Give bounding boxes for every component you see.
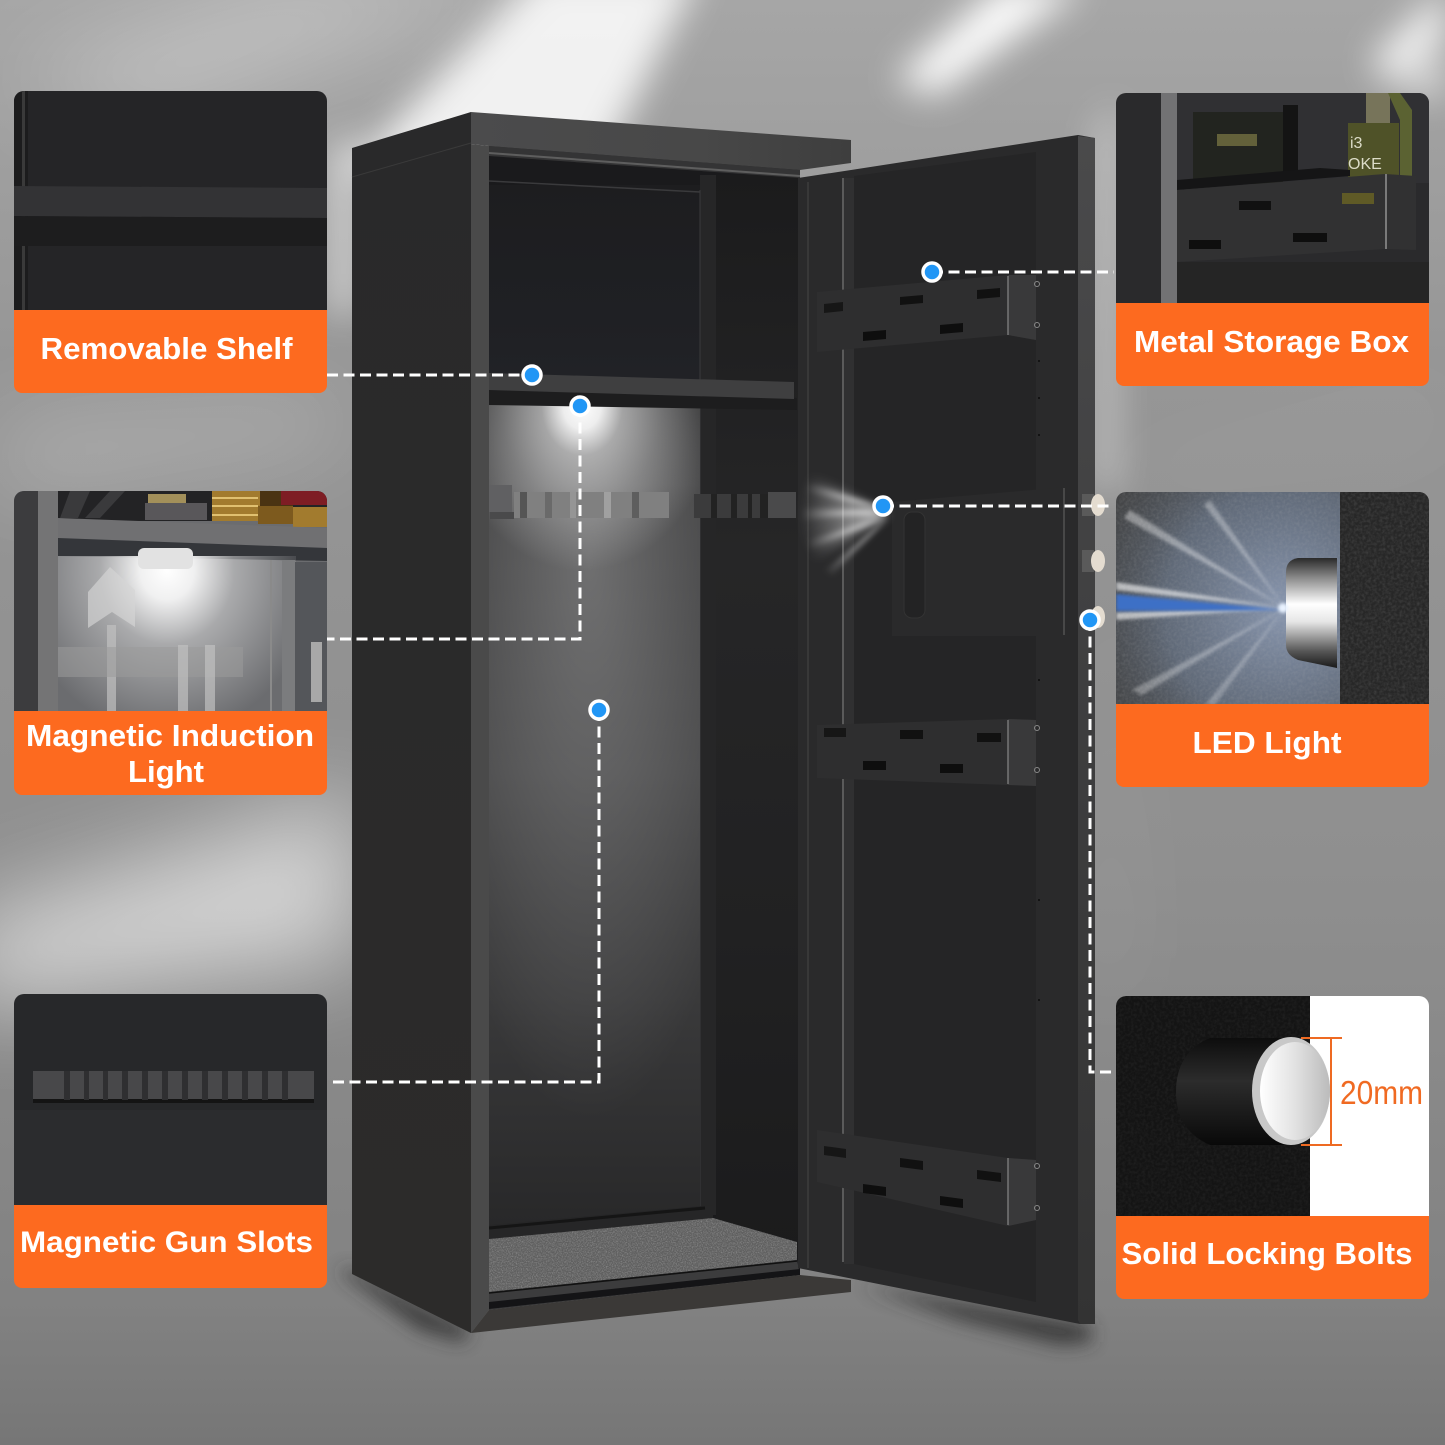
door locking bolts (1082, 494, 1105, 628)
orange label bar (1116, 1216, 1429, 1299)
panel: removable shelf (14, 91, 327, 393)
panel: LED light (1116, 492, 1429, 787)
safe door, open (798, 135, 1105, 1324)
label: Removable Shelf (40, 331, 293, 366)
cabinet floor carpet (489, 1218, 797, 1292)
callout lines (327, 272, 1114, 1082)
label: Magnetic Induction (26, 718, 314, 753)
light photo (14, 491, 327, 720)
top door bracket (817, 275, 1040, 352)
label: LED Light (1192, 725, 1342, 760)
panel: magnetic induction light (14, 491, 327, 795)
storage box photo (1116, 93, 1429, 308)
door LED light flare (800, 470, 888, 575)
cabinet bottom plinth (471, 1275, 851, 1333)
bolt photo (1116, 996, 1429, 1221)
storage box photo: OKE (1348, 156, 1382, 173)
LED photo (1116, 492, 1429, 707)
cabinet front frame (471, 112, 851, 170)
safe cabinet body (352, 112, 851, 1333)
cabinet interior back wall (489, 140, 800, 1315)
bottom rail (489, 1260, 800, 1310)
under-shelf shadow (489, 390, 716, 408)
magnetic gun slots strip (489, 485, 796, 519)
back wall lit by LED (489, 402, 700, 1226)
orange label bar (14, 310, 327, 393)
label: Metal Storage Box (1134, 324, 1410, 359)
light pool (58, 556, 296, 720)
shelf (489, 373, 794, 399)
baseboard (489, 1205, 713, 1239)
panel: solid locking bolts (1116, 996, 1429, 1299)
label: Magnetic Gun Slots (20, 1226, 313, 1259)
orange label bar (14, 1205, 327, 1288)
orange label bar (14, 711, 327, 795)
bottom door bracket (817, 1130, 1040, 1226)
callout marker dots (523, 263, 1099, 719)
storage pocket on door (892, 487, 1067, 636)
middle door bracket (817, 719, 1040, 786)
panel: metal storage box (1116, 93, 1429, 386)
orange label bar (1116, 704, 1429, 787)
right interior wall (716, 418, 798, 854)
shelf photo (14, 91, 327, 316)
slots photo (14, 994, 327, 1210)
label: Solid Locking Bolts (1122, 1236, 1412, 1271)
dimension value: 20mm (1340, 1074, 1423, 1111)
storage box photo: i3 (1350, 135, 1363, 152)
orange label bar (1116, 303, 1429, 386)
label: Light (128, 754, 204, 789)
left side panel (352, 112, 471, 1333)
safe cabinet drop shadow (338, 1270, 1092, 1345)
20mm dimension marks (1301, 1038, 1342, 1145)
panel: magnetic gun slots (14, 994, 327, 1288)
